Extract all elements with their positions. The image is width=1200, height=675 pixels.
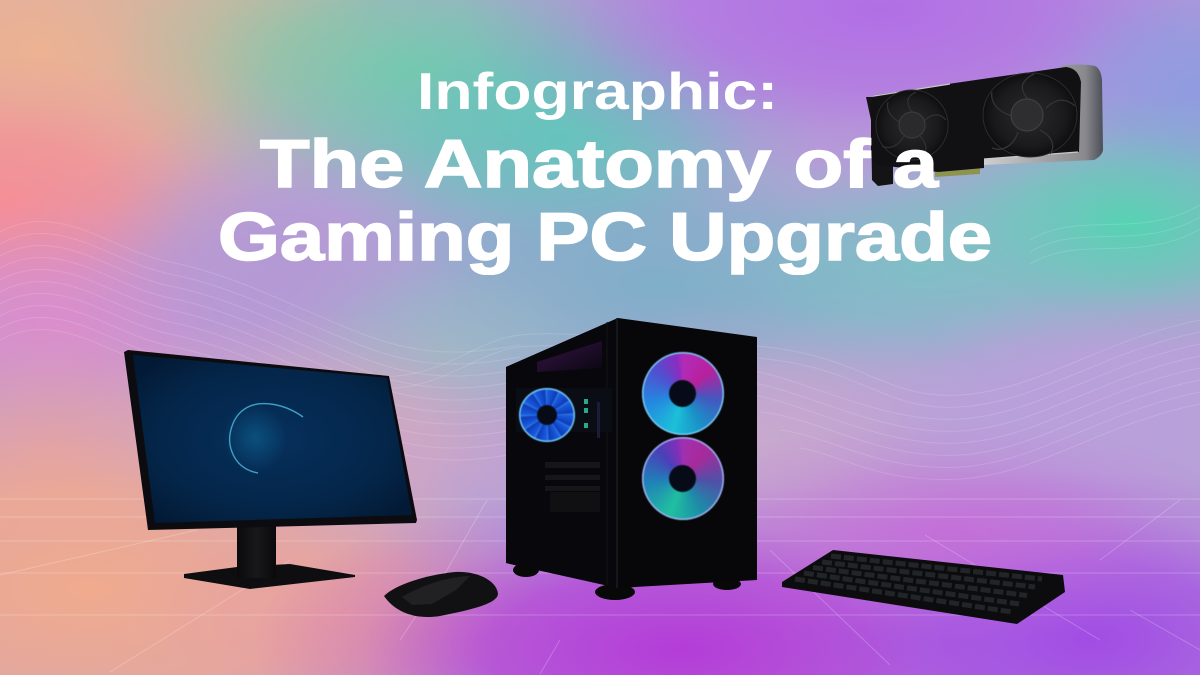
graphics card bbox=[866, 64, 1103, 186]
front fan top bbox=[642, 352, 724, 435]
keyboard bbox=[782, 550, 1065, 624]
side cooler fan bbox=[519, 388, 575, 442]
title: Infographic: bbox=[417, 63, 778, 121]
card body bbox=[871, 67, 1081, 172]
right fan bbox=[983, 73, 1077, 157]
title bbox=[218, 63, 992, 275]
monitor bbox=[124, 350, 417, 589]
stand neck bbox=[237, 524, 276, 578]
bezel bbox=[124, 350, 417, 530]
PC case bbox=[506, 318, 757, 600]
left fan bbox=[876, 90, 948, 160]
silver shroud end bbox=[983, 64, 1103, 165]
mouse bbox=[384, 572, 498, 617]
title: The Anatomy of a bbox=[260, 126, 939, 202]
title: Gaming PC Upgrade bbox=[218, 199, 992, 275]
crescent bbox=[223, 404, 303, 473]
bracket bbox=[866, 97, 893, 186]
screen bbox=[133, 355, 412, 523]
gold connector bbox=[935, 168, 980, 177]
front fan bottom bbox=[642, 437, 724, 520]
stand base bbox=[184, 564, 355, 589]
